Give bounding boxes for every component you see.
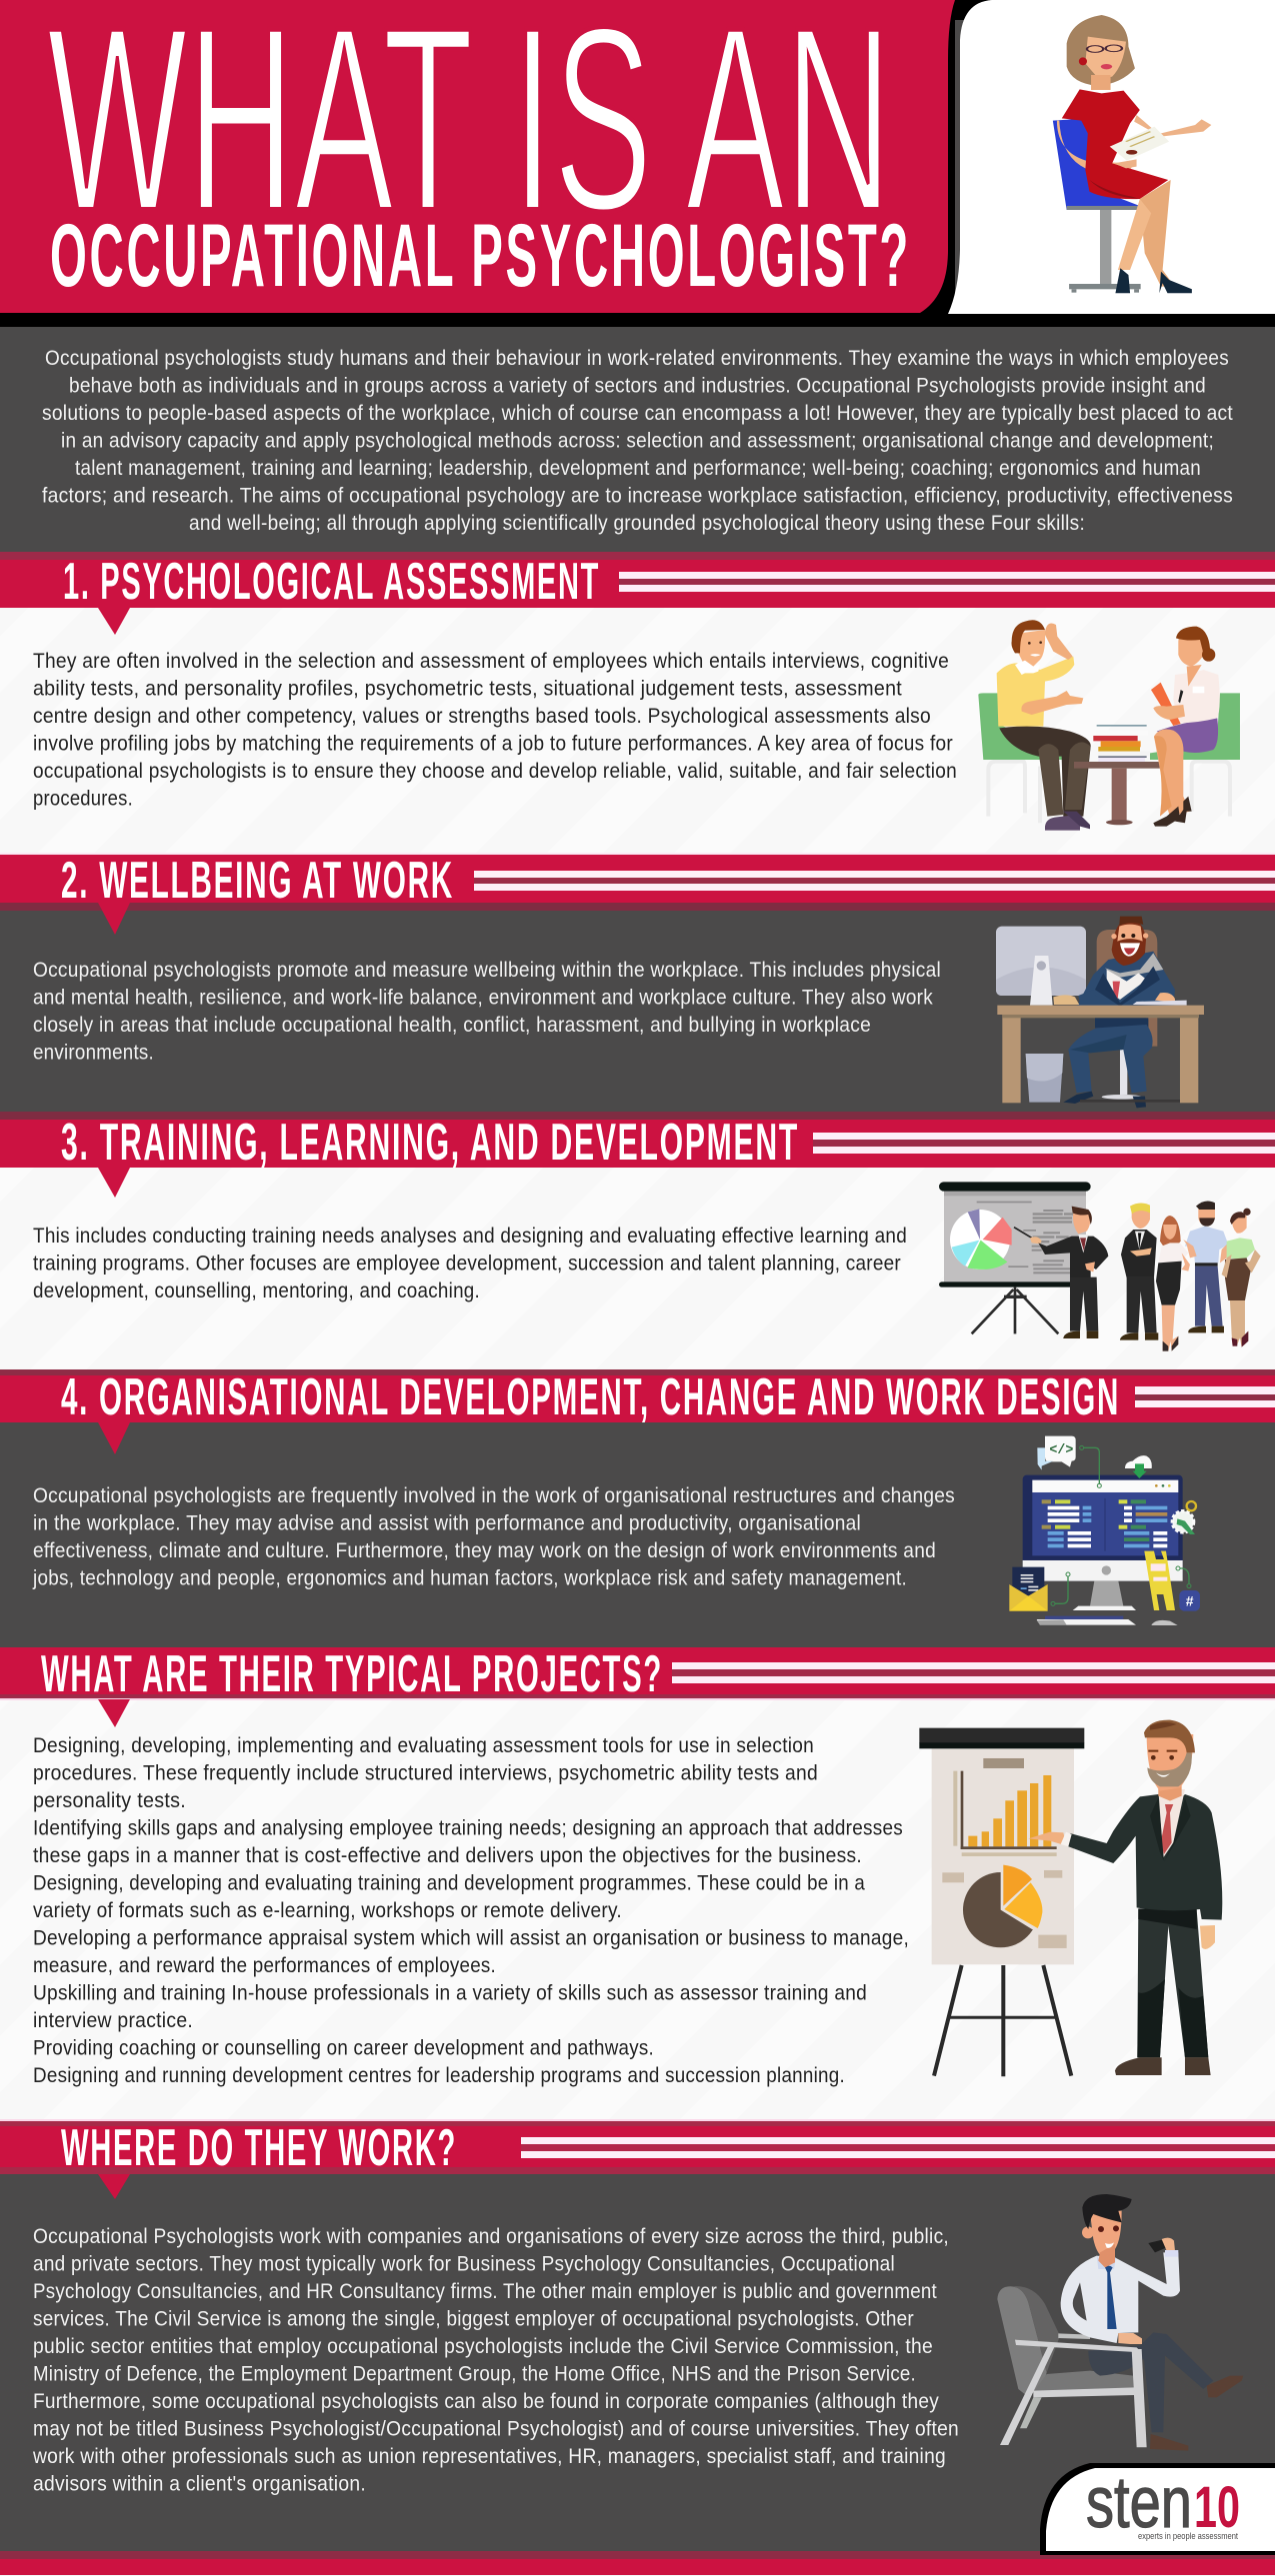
body text: where: and private sectors. They most typically work for Business Psychology Consultancies, Occupational — [33, 2251, 895, 2275]
body text: 2: closely in areas that include occupational health, conflict, harassment, and bullying in workplace — [33, 1013, 871, 1037]
illustration: man on phone in chair — [997, 2194, 1243, 2451]
body text: projects: Designing, developing, implementing and evaluating assessment tools for use in selection — [33, 1733, 814, 1757]
body text: projects: Identifying skills gaps and analysing employee training needs; designing an approach that addresses — [33, 1815, 903, 1839]
heading: where: WHERE DO THEY WORK? — [61, 2119, 457, 2177]
body text: projects: Designing, developing and evaluating training and development programmes. These could be in a — [33, 1871, 865, 1895]
body text: 4: jobs, technology and people, ergonomics and human factors, workplace risk and safety management. — [32, 1565, 907, 1589]
body text: 1: ability tests, and personality profiles, psychometric tests, situational judgement tests, assessment — [33, 676, 902, 700]
body text: where: public sector entities that employ occupational psychologists include the Civil Service Commission, the — [33, 2334, 933, 2358]
panel: section 2 wellbeing at work — [0, 852, 1275, 1108]
illustration: two people talking at a table — [978, 620, 1240, 831]
body text: 4: in the workplace. They may advise and assist with performance and productivity, organisational — [33, 1511, 861, 1535]
illustration: man at desk with computer — [996, 917, 1204, 1108]
body text: projects: procedures. These frequently include structured interviews, psychometric ability tests and — [33, 1761, 818, 1785]
illustration: man presenting charts on flipchart — [919, 1720, 1222, 2076]
body text: where: Furthermore, some occupational psychologists can also be found in corporate companies (although they — [33, 2389, 939, 2413]
body text: 2: and mental health, resilience, and work-life balance, environment and workplace culture. They also work — [33, 986, 933, 1010]
body text: where: services. The Civil Service is among the single, biggest employer of occupational psychologists. Other — [33, 2307, 914, 2331]
body text: 2 — [33, 958, 941, 1064]
body text: 2: environments. — [33, 1040, 154, 1064]
body text: where: may not be titled Business Psychologist/Occupational Psychologist) and of course universities. They often — [33, 2417, 959, 2441]
body text: 1: involve profiling jobs by matching the requirements of a job to future performances. A key area of focus for — [33, 732, 953, 756]
body text: where: work with other professionals such as union representatives, HR, managers, specialist staff, and training — [32, 2444, 946, 2468]
body text: 1: centre design and other competency, values or strengths based tools. Psychological assessments also — [33, 704, 931, 728]
body text: projects: Designing and running development centres for leadership programs and succession planning. — [33, 2063, 845, 2087]
illustration: computer monitor with code — [1009, 1436, 1200, 1625]
body text: 3: training programs. Other focuses are employee development, succession and talent planning, career — [33, 1252, 901, 1276]
body text: 1: They are often involved in the selection and assessment of employees which entails interviews, cognitive — [33, 649, 949, 673]
body text: where: advisors within a client's organisation. — [33, 2471, 366, 2495]
panel: section 1 psychological assessment — [0, 552, 1275, 855]
body text: where — [32, 2224, 959, 2495]
illustration: presenter and team with pie chart board — [939, 1182, 1261, 1351]
body text: 4: effectiveness, climate and culture. Furthermore, they may work on the design of work environments and — [33, 1538, 936, 1562]
illustration: computer monitor with code: </> — [1049, 1442, 1073, 1458]
body text: projects — [33, 1733, 909, 2087]
body text: projects: Upskilling and training In-house professionals in a variety of skills such as assessor training and — [33, 1981, 867, 2005]
body text: 4: Occupational psychologists are frequently involved in the work of organisational restructures and changes — [33, 1483, 955, 1507]
body text: projects: these gaps in a manner that is cost-effective and delivers upon the objectives for the business. — [33, 1843, 862, 1867]
illustration: computer monitor with code: # — [1186, 1593, 1194, 1609]
heading: 1: 1. PSYCHOLOGICAL ASSESSMENT — [63, 553, 600, 611]
body text: 3: development, counselling, mentoring, and coaching. — [33, 1279, 480, 1302]
body text: 3: This includes conducting training needs analyses and designing and evaluating effective learning and — [33, 1224, 907, 1248]
body text: 1: occupational psychologists is to ensure they choose and develop reliable, valid, suitable, and fair selection — [33, 759, 957, 783]
body text: projects: Providing coaching or counselling on career development and pathways. — [33, 2035, 654, 2059]
logo wordmark: sten — [1086, 2463, 1192, 2543]
body text: 4 — [32, 1483, 955, 1589]
body text: projects: interview practice. — [33, 2008, 193, 2032]
intro text — [42, 346, 1233, 535]
heading: projects: WHAT ARE THEIR TYPICAL PROJECTS? — [41, 1645, 663, 1703]
panel: section 4 organisational development — [0, 1368, 1275, 1625]
logo number: 10 — [1194, 2475, 1240, 2540]
panel: section 3 training learning development — [0, 1112, 1275, 1369]
body text: projects: Developing a performance appraisal system which will assist an organisation or business to manage, — [33, 1925, 909, 1949]
body text: 1 — [33, 649, 957, 810]
body text: 3 — [33, 1224, 907, 1302]
body text: where: Occupational Psychologists work with companies and organisations of every size across the third, public, — [33, 2224, 949, 2248]
header banner — [0, 0, 1275, 327]
footer strip — [0, 2551, 1275, 2576]
body text: projects: measure, and reward the performances of employees. — [33, 1953, 496, 1977]
intro text: and well-being; all through applying scientifically grounded psychological theory using these Four skills: — [189, 511, 1085, 535]
logo panel — [1040, 2463, 1275, 2555]
logo tagline: experts in people assessment — [1138, 2531, 1238, 2542]
body text: 2: Occupational psychologists promote and measure wellbeing within the workplace. This includes physical — [33, 958, 941, 982]
body text: projects: personality tests. — [33, 1788, 186, 1812]
panel: where do they work — [0, 2119, 1275, 2495]
heading: 2: 2. WELLBEING AT WORK — [61, 852, 454, 910]
body text: where: Ministry of Defence, the Employment Department Group, the Home Office, NHS and the Prison Service. — [33, 2361, 916, 2385]
body text: where: Psychology Consultancies, and HR Consultancy firms. The other main employer is public and government — [33, 2279, 937, 2303]
panel: typical projects — [0, 1645, 1275, 2119]
body text: 1: procedures. — [33, 786, 133, 810]
body text: projects: variety of formats such as e-learning, workshops or remote delivery. — [33, 1898, 622, 1922]
illustration: woman on office chair — [1053, 15, 1211, 293]
